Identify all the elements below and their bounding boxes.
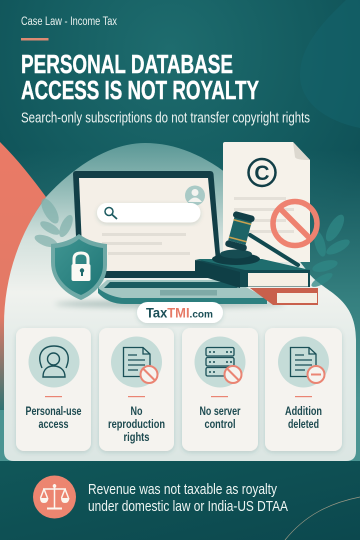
card: no reproduction rights: reproduction <box>108 419 165 431</box>
search bar <box>97 203 200 222</box>
title: PERSONAL DATABASE <box>21 51 233 79</box>
footer text: Revenue was not taxable as royalty <box>88 482 278 498</box>
footer text: under domestic law or India-US DTAA <box>88 499 288 515</box>
title <box>21 51 259 105</box>
security shield <box>51 234 107 300</box>
card: personal-use access <box>16 328 91 451</box>
kicker: Case Law - Income Tax: Case Law - Income Tax <box>21 16 117 28</box>
coral side shape <box>0 142 46 410</box>
card: personal-use access: Personal-use <box>26 406 82 418</box>
laptop base <box>98 287 267 304</box>
card: no reproduction rights <box>99 328 174 451</box>
avatar <box>185 186 205 206</box>
TaxTMI.com logo pill: TaxTMI.com <box>146 306 213 320</box>
icon: document with minus <box>290 348 324 383</box>
prohibition sign <box>273 202 317 246</box>
top right curved shape <box>300 0 360 128</box>
laptop screen <box>73 171 222 278</box>
card: addition deleted <box>265 328 342 451</box>
footer text <box>88 482 288 515</box>
law books <box>195 259 318 305</box>
card: personal-use access: access <box>38 419 68 431</box>
icon: scales of justice <box>33 476 76 518</box>
soft ground shadows <box>55 300 285 308</box>
light arch backdrop <box>4 143 356 461</box>
leaves right <box>310 212 352 289</box>
card: no server control: No server <box>200 406 241 418</box>
accent line <box>21 38 48 40</box>
icon: server with prohibition <box>206 348 242 383</box>
gavel <box>212 211 298 265</box>
lower side tint <box>0 150 360 461</box>
title: ACCESS IS NOT ROYALTY <box>21 77 259 105</box>
TaxTMI.com logo pill <box>137 302 223 323</box>
card: addition deleted: deleted <box>288 419 319 431</box>
footer band <box>0 461 360 540</box>
laptop <box>73 171 267 304</box>
icon: document with prohibition <box>124 348 158 383</box>
copyright document <box>223 142 317 262</box>
card: no server control <box>182 328 258 451</box>
dark book <box>196 260 310 287</box>
card: addition deleted: Addition <box>285 406 322 418</box>
red book <box>250 288 318 305</box>
leaves left <box>33 196 76 250</box>
copyright symbol: C <box>254 162 270 185</box>
card: no server control: control <box>204 419 236 431</box>
card: no reproduction rights: No <box>130 406 142 418</box>
icon: person <box>40 346 68 377</box>
card: no reproduction rights: rights <box>124 432 150 444</box>
